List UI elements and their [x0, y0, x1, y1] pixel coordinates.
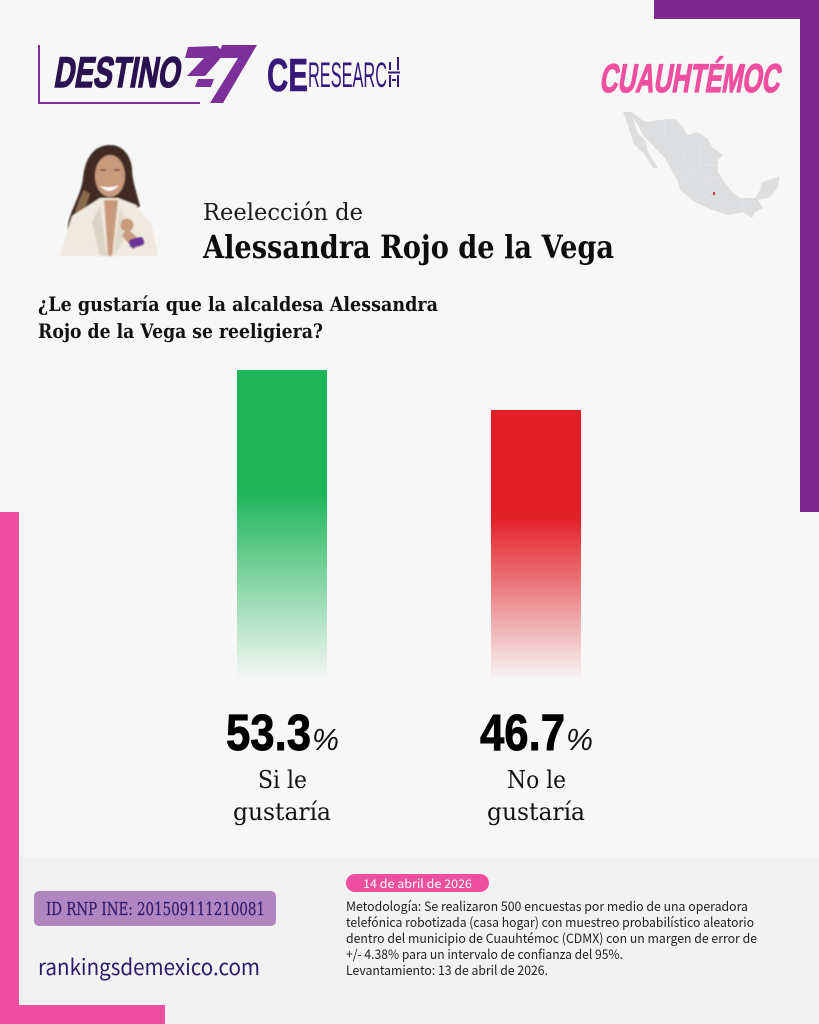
date pill: 14 de abril de 2026: [363, 875, 472, 892]
bar: Si le gustaría: [237, 370, 327, 680]
purple corner frame: [654, 0, 819, 512]
result: 53.3% Si le gustaría: [226, 704, 339, 826]
result: 46.7% No le gustaría: gustaría: [487, 798, 585, 826]
bar: No le gustaría: [491, 410, 581, 680]
question: ¿Le gustaría que la alcaldesa Alessandra: [38, 293, 438, 316]
question: [38, 293, 438, 343]
pink corner frame: [0, 512, 165, 1024]
logo: CE Research: [267, 49, 400, 101]
map of Mexico: [623, 112, 780, 218]
registration badge: ID RNP INE: 201509111210081: [46, 899, 265, 920]
heading: [202, 200, 614, 266]
heading: Reelección de: [203, 200, 363, 226]
result: 46.7% No le gustaría: 46.7: [480, 704, 565, 761]
website: rankingsdemexico.com: [38, 950, 260, 982]
result: 46.7% No le gustaría: %: [566, 722, 593, 757]
heading: Alessandra Rojo de la Vega: [202, 228, 614, 266]
result: 46.7% No le gustaría: No le: [507, 766, 566, 794]
result: 53.3% Si le gustaría: 53.3: [226, 704, 311, 761]
methodology: Metodología: Se realizaron 500 encuestas por medio de una operadora: [346, 896, 748, 915]
question: Rojo de la Vega se reeligiera?: [38, 320, 323, 343]
registration badge: [34, 891, 276, 926]
result: 53.3% Si le gustaría: gustaría: [233, 798, 331, 826]
logo: CE Research: RESEARC: [308, 56, 387, 95]
date pill: [346, 874, 489, 892]
methodology: telefónica robotizada (casa hogar) con muestreo probabilístico aleatorio: [346, 912, 754, 931]
result: 53.3% Si le gustaría: %: [312, 722, 339, 757]
methodology: +/- 4.38% para un intervalo de confianza del 95%.: [346, 944, 623, 963]
portrait photo: [60, 145, 158, 256]
methodology: dentro del municipio de Cuauhtémoc (CDMX) con un margen de error de: [346, 928, 757, 947]
logo: Destino 27: DESTINO: [51, 49, 186, 97]
methodology: [346, 896, 757, 979]
result: 46.7% No le gustaría: [480, 704, 593, 826]
logo: CE Research: CE: [267, 49, 308, 101]
methodology: Levantamiento: 13 de abril de 2026.: [346, 960, 548, 979]
result: 53.3% Si le gustaría: Si le: [258, 766, 307, 794]
